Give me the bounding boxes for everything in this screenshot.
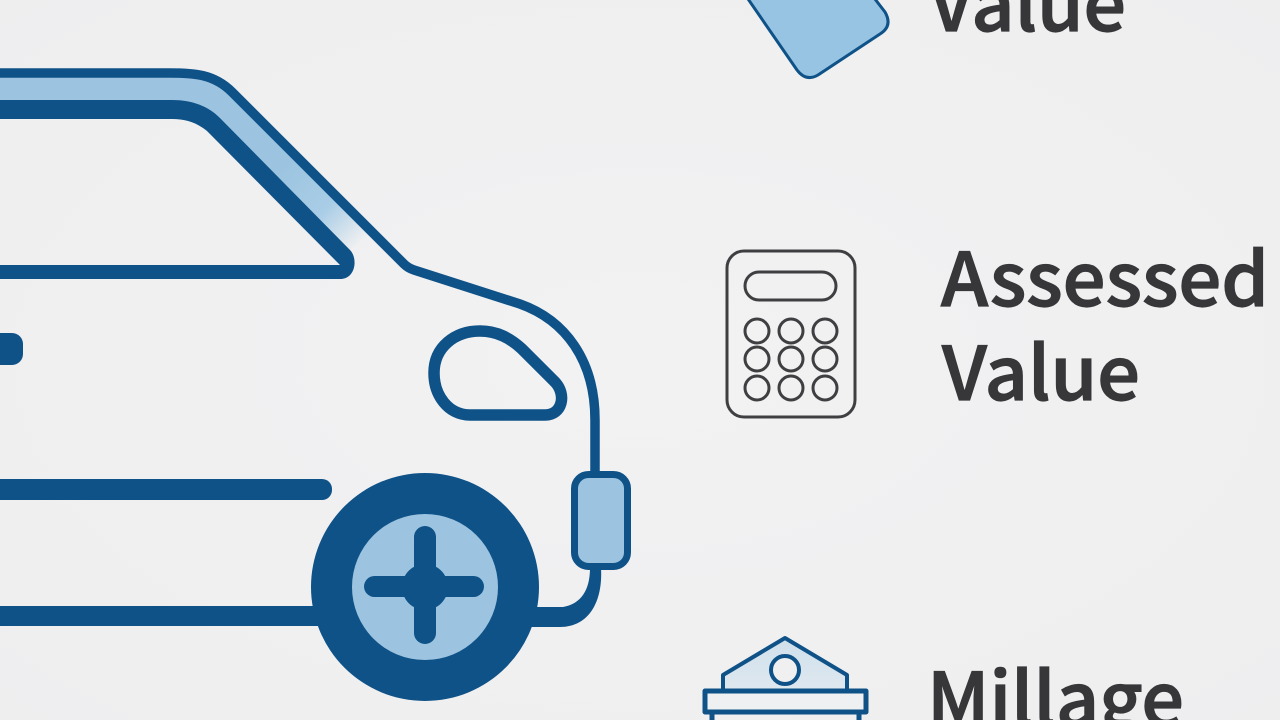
icon: car illustration — [0, 73, 628, 701]
text: Assessed Value: Value — [941, 315, 1140, 422]
wheel — [311, 473, 539, 701]
icon: calculator — [727, 251, 855, 417]
door handle — [0, 333, 23, 365]
car roof highlight band — [0, 76, 370, 250]
bumper light — [574, 474, 628, 566]
bumper connector — [530, 568, 601, 627]
text: Assessed Value — [941, 221, 1269, 422]
icon: bank building — [705, 638, 866, 720]
icon: tag, top — [746, 0, 888, 78]
text: Assessed Value: Assessed — [941, 221, 1269, 328]
body side line — [0, 479, 332, 500]
car body outline — [0, 73, 595, 474]
lower sill — [0, 606, 330, 626]
window outline and inner roof edge — [0, 100, 355, 279]
headlight — [434, 331, 562, 415]
